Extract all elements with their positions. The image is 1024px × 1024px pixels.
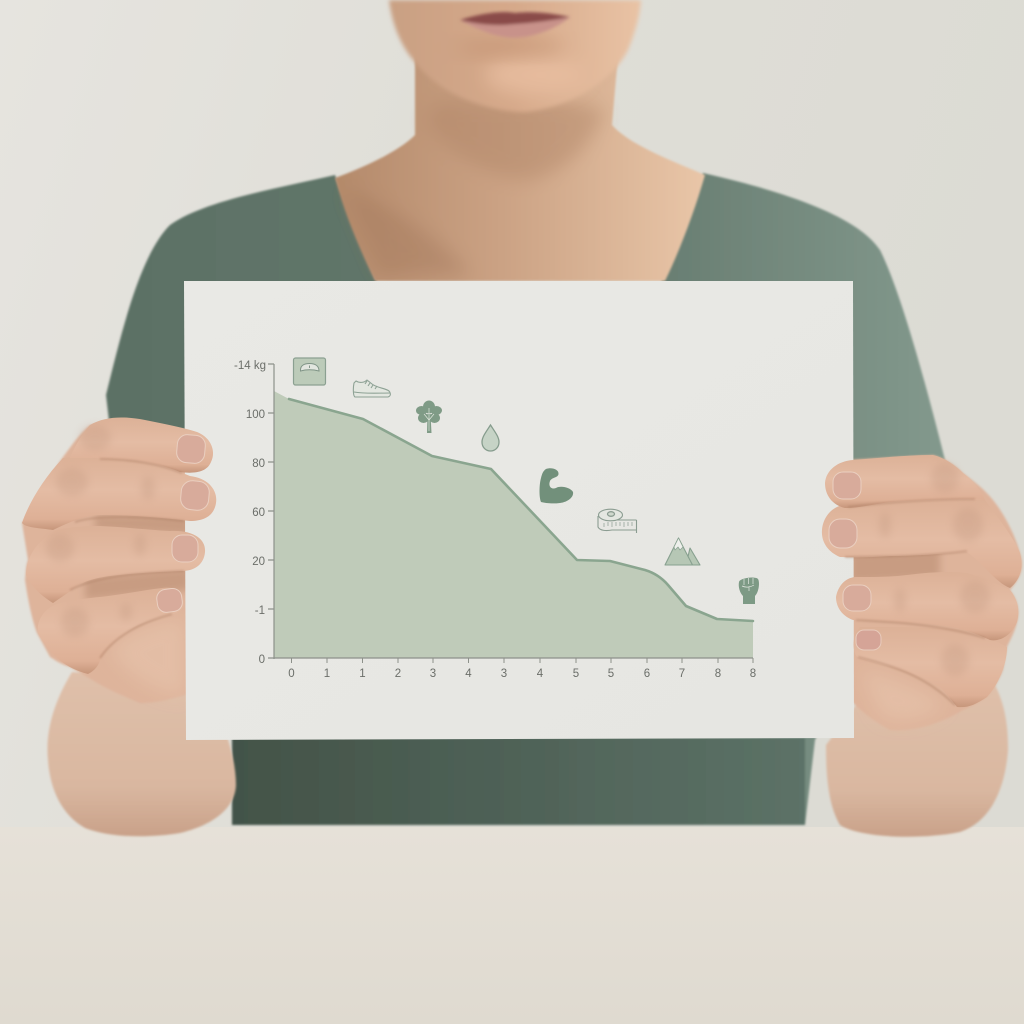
x axis: 1 (359, 668, 366, 680)
face (389, 0, 641, 112)
left forearm (47, 672, 236, 836)
little finger (38, 587, 184, 674)
x axis: 7 (679, 668, 685, 680)
ring finger (836, 572, 1018, 640)
chart area fill (274, 391, 753, 658)
right hand fingers (822, 455, 1022, 707)
icon: water drop (482, 425, 499, 451)
person photo backdrop (22, 0, 1022, 837)
area chart (234, 360, 756, 680)
x axis: 5 (608, 668, 614, 680)
x axis: 2 (395, 668, 401, 680)
x axis: 4 (537, 668, 544, 680)
finger creases (70, 459, 184, 658)
knuckle shading (879, 463, 990, 676)
lips (460, 12, 570, 38)
y axis: 80 (252, 458, 265, 470)
y axis: 20 (252, 556, 265, 568)
finger creases (845, 499, 985, 705)
weight trend line (289, 399, 753, 621)
x axis: 6 (644, 668, 650, 680)
x axis: 4 (465, 668, 472, 680)
middle finger (22, 457, 216, 530)
x axis (288, 658, 756, 680)
x axis: 5 (573, 668, 579, 680)
left hand fingers (22, 417, 216, 674)
right hand back and palm (845, 455, 1022, 730)
x axis: 1 (324, 668, 330, 680)
x axis: 0 (288, 668, 295, 680)
left hand back and palm (22, 425, 190, 703)
middle finger (822, 500, 1022, 588)
knuckle shading (46, 425, 155, 637)
index finger (70, 417, 213, 473)
icon: bathroom scale (294, 358, 326, 385)
icon: measuring tape (598, 509, 636, 533)
icon: flexed muscle arm (540, 468, 573, 503)
x axis: 8 (750, 668, 756, 680)
y axis: 0 (259, 654, 265, 666)
shirt (106, 173, 945, 825)
y axis: 60 (252, 507, 265, 519)
y axis: -14 kg (234, 360, 266, 372)
right forearm (826, 685, 1008, 837)
little finger (854, 627, 1007, 707)
y axis: -1 (255, 605, 265, 617)
icon: raised fist (739, 578, 759, 604)
index finger (825, 455, 985, 508)
ring finger (26, 526, 205, 603)
table (0, 827, 1024, 1024)
icon: mountains (665, 538, 700, 565)
icon: running shoe (353, 380, 390, 397)
x axis: 3 (430, 668, 436, 680)
neck and chest (335, 55, 705, 281)
paper sheet (184, 281, 854, 740)
x axis: 3 (501, 668, 507, 680)
y axis (234, 360, 753, 666)
x axis: 8 (715, 668, 721, 680)
y axis: 100 (246, 409, 265, 421)
icon: spinach leaf (416, 400, 442, 433)
